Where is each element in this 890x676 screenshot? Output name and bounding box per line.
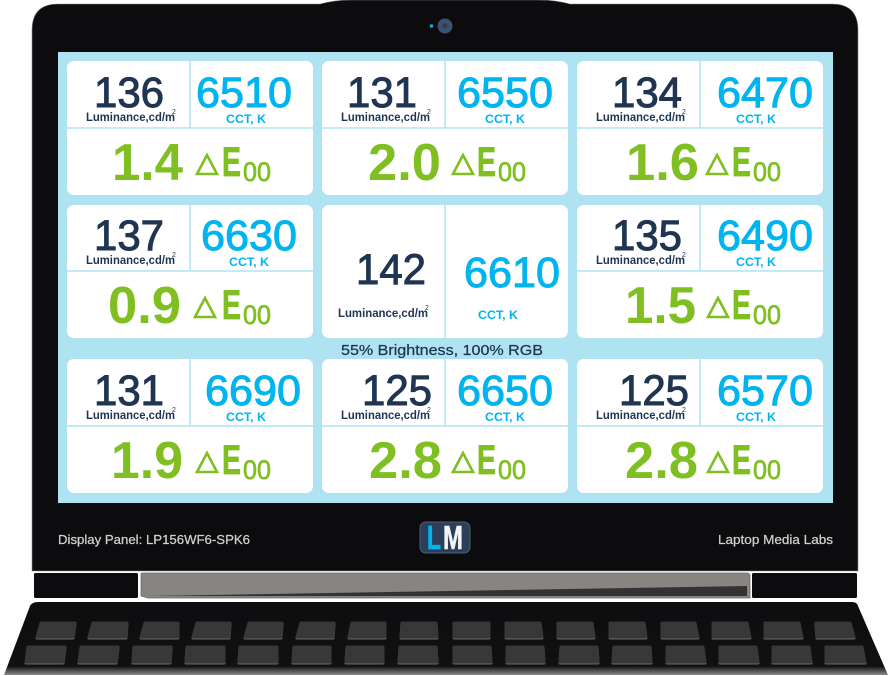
panel: top centre: Luminance,cd/m [341,110,430,124]
panel: middle right: 00 [753,300,781,330]
right hinge [752,573,857,598]
panel: middle left: 0.9 [108,277,181,335]
panel: centre: 2 [425,305,429,312]
panel: centre [322,205,568,338]
panel: bottom left: 00 [243,455,271,485]
laptop lid bezel [32,0,858,571]
panel: middle right: 135 [612,212,682,260]
panel: bottom right: 2.8 [625,432,698,490]
panel: top left: E [222,138,241,185]
panel: top right: 2 [682,109,686,116]
panel: bottom right: 2 [682,407,686,414]
panel: top right: 1.6 [626,134,699,192]
panel: centre: 142 [356,246,426,294]
panel: bottom centre [322,359,568,493]
panel: bottom left: 1.9 [111,432,183,490]
panel: middle right: E [732,281,751,328]
panel: bottom left: CCT, K [226,410,266,424]
panel: top left: 00 [243,157,271,187]
panel: top right: 6470 [717,69,813,117]
LM logo [420,519,470,556]
caption: test conditions: 55% Brightness, 100% RGB [341,342,543,359]
panel: centre: 6610 [464,249,560,297]
panel: bottom centre: 125 [362,367,432,415]
keyboard base [4,602,888,675]
panel: top centre: 131 [347,69,417,117]
panel: bottom centre: 00 [498,455,526,485]
panel: centre: Luminance,cd/m [338,306,428,320]
LM logo: M [443,519,463,556]
panel: middle left: 137 [94,212,164,260]
panel: top left: Luminance,cd/m [86,110,175,124]
lab label: Laptop Media Labs [718,532,834,547]
panel: top centre [322,61,568,195]
panel: top centre: CCT, K [485,112,525,126]
panel: top centre: E [477,138,496,185]
panel: bottom right: 00 [753,455,781,485]
panel: middle right: CCT, K [736,255,776,269]
panel: bottom left: E [222,436,241,483]
panel: middle right: 1.5 [625,277,696,335]
panel: top left: 2 [172,109,176,116]
panel: bottom centre: Luminance,cd/m [341,408,430,422]
panel: top centre: 2.0 [368,134,441,192]
LM logo: L [427,519,441,556]
panel: bottom centre: E [477,436,496,483]
left hinge [34,573,138,598]
panel: middle left: E [222,281,241,328]
panel: top right: CCT, K [736,112,776,126]
panel: bottom left: Luminance,cd/m [86,408,175,422]
panel: middle right [577,205,823,338]
centre hinge bar [141,573,750,598]
panel: top right: 00 [753,157,781,187]
panel: top left [67,61,313,195]
panel: bottom right: CCT, K [736,410,776,424]
panel: middle left: 6630 [201,212,297,260]
panel: top right: 134 [612,69,682,117]
panel: bottom right: Luminance,cd/m [596,408,685,422]
panel: middle left: 00 [243,300,271,330]
panel: bottom centre: 2 [427,407,431,414]
panel: top centre: 6550 [457,69,553,117]
panel: bottom centre: CCT, K [485,410,525,424]
panel: bottom right [577,359,823,493]
panel: middle right: 2 [682,252,686,259]
panel: bottom right: 125 [619,367,689,415]
panel: bottom right: E [732,436,751,483]
panel: top left: CCT, K [226,112,266,126]
screen [58,52,833,503]
panel: bottom left: 2 [172,407,176,414]
panel: middle left: 2 [172,252,176,259]
panel: bottom left: 131 [94,367,164,415]
panel: top right [577,61,823,195]
panel: centre: CCT, K [478,308,518,322]
panel: top centre: 2 [427,109,431,116]
panel: top right: Luminance,cd/m [596,110,685,124]
panel: bottom left: 6690 [205,367,301,415]
keyboard keys [26,623,865,662]
panel: bottom centre: 2.8 [369,432,442,490]
display panel label: Display Panel: LP156WF6-SPK6 [58,532,250,547]
panel: bottom centre: 6650 [457,367,553,415]
panel: bottom right: 6570 [717,367,813,415]
panel: middle left [67,205,313,338]
panel: top left: 1.4 [112,134,183,192]
panel: top left: 136 [94,69,164,117]
panel: top right: E [732,138,751,185]
panel: middle left: CCT, K [229,255,269,269]
panel: top left: 6510 [196,69,292,117]
panel: middle right: Luminance,cd/m [596,253,685,267]
webcam [430,18,452,34]
panel: top centre: 00 [498,157,526,187]
panel: middle right: 6490 [717,212,813,260]
panel: middle left: Luminance,cd/m [86,253,175,267]
panel: bottom left [67,359,313,493]
